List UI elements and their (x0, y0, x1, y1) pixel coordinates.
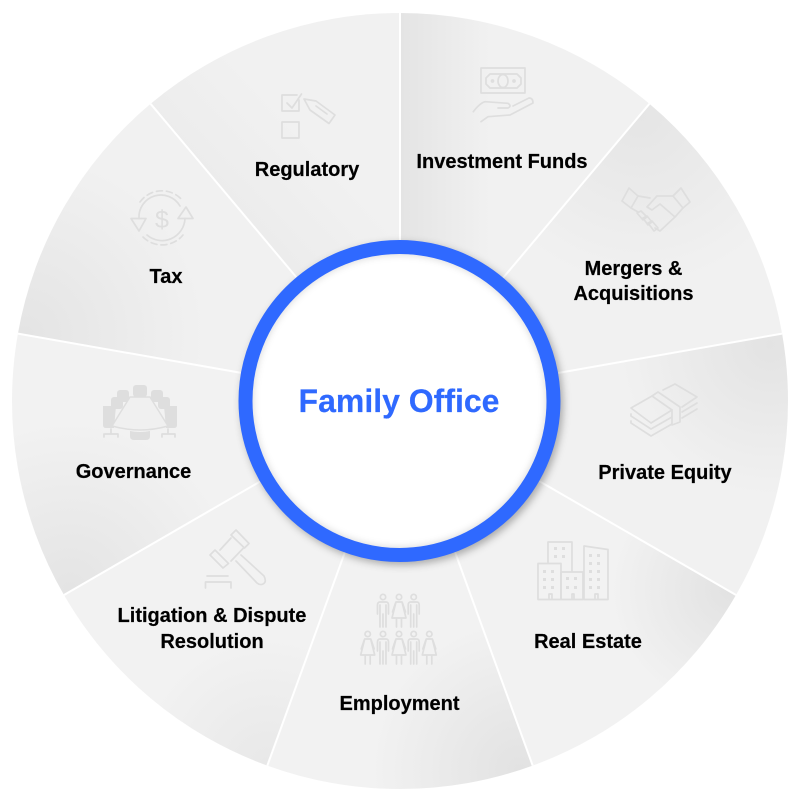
label: private equity: Private Equity (598, 462, 733, 484)
panel: mergers and acquisitions (400, 104, 782, 401)
icon: city buildings (538, 542, 608, 600)
label: litigation and dispute resolution: Litigation & Dispute (118, 605, 306, 627)
icon: gavel (206, 530, 265, 588)
label: tax: Tax (150, 266, 182, 288)
title: Family Office (299, 383, 499, 419)
panel: tax (18, 104, 400, 401)
label: employment: Employment (339, 693, 460, 715)
panel: private equity (400, 334, 788, 595)
icon: dollar with circular arrows (131, 191, 193, 245)
icon: boardroom table (103, 385, 177, 440)
label: litigation and dispute resolution: Resolution (160, 631, 264, 653)
icon: group of people (361, 594, 436, 664)
icon: dollar with circular arrows: $ (155, 206, 169, 234)
icon: stacks of cash (631, 384, 697, 436)
icon detail: building windows (543, 547, 600, 589)
icon: handshake (622, 188, 690, 231)
icon: checklist and pencil (282, 94, 335, 138)
panel: governance (12, 334, 400, 595)
icon: money in hand (473, 68, 533, 122)
panel: regulatory (151, 13, 400, 401)
panel: investment funds (400, 13, 649, 401)
center hub: family office (241, 243, 563, 565)
label: mergers and acquisitions: Mergers & (585, 258, 682, 280)
label: investment funds: Investment Funds (416, 151, 588, 173)
panel: employment (267, 401, 533, 789)
label: governance: Governance (76, 461, 191, 483)
panel: litigation and dispute resolution (64, 401, 400, 766)
label: regulatory: Regulatory (255, 159, 360, 181)
label: real estate: Real Estate (534, 631, 642, 653)
panel: real estate (400, 401, 736, 766)
label: mergers and acquisitions: Acquisitions (573, 283, 694, 305)
